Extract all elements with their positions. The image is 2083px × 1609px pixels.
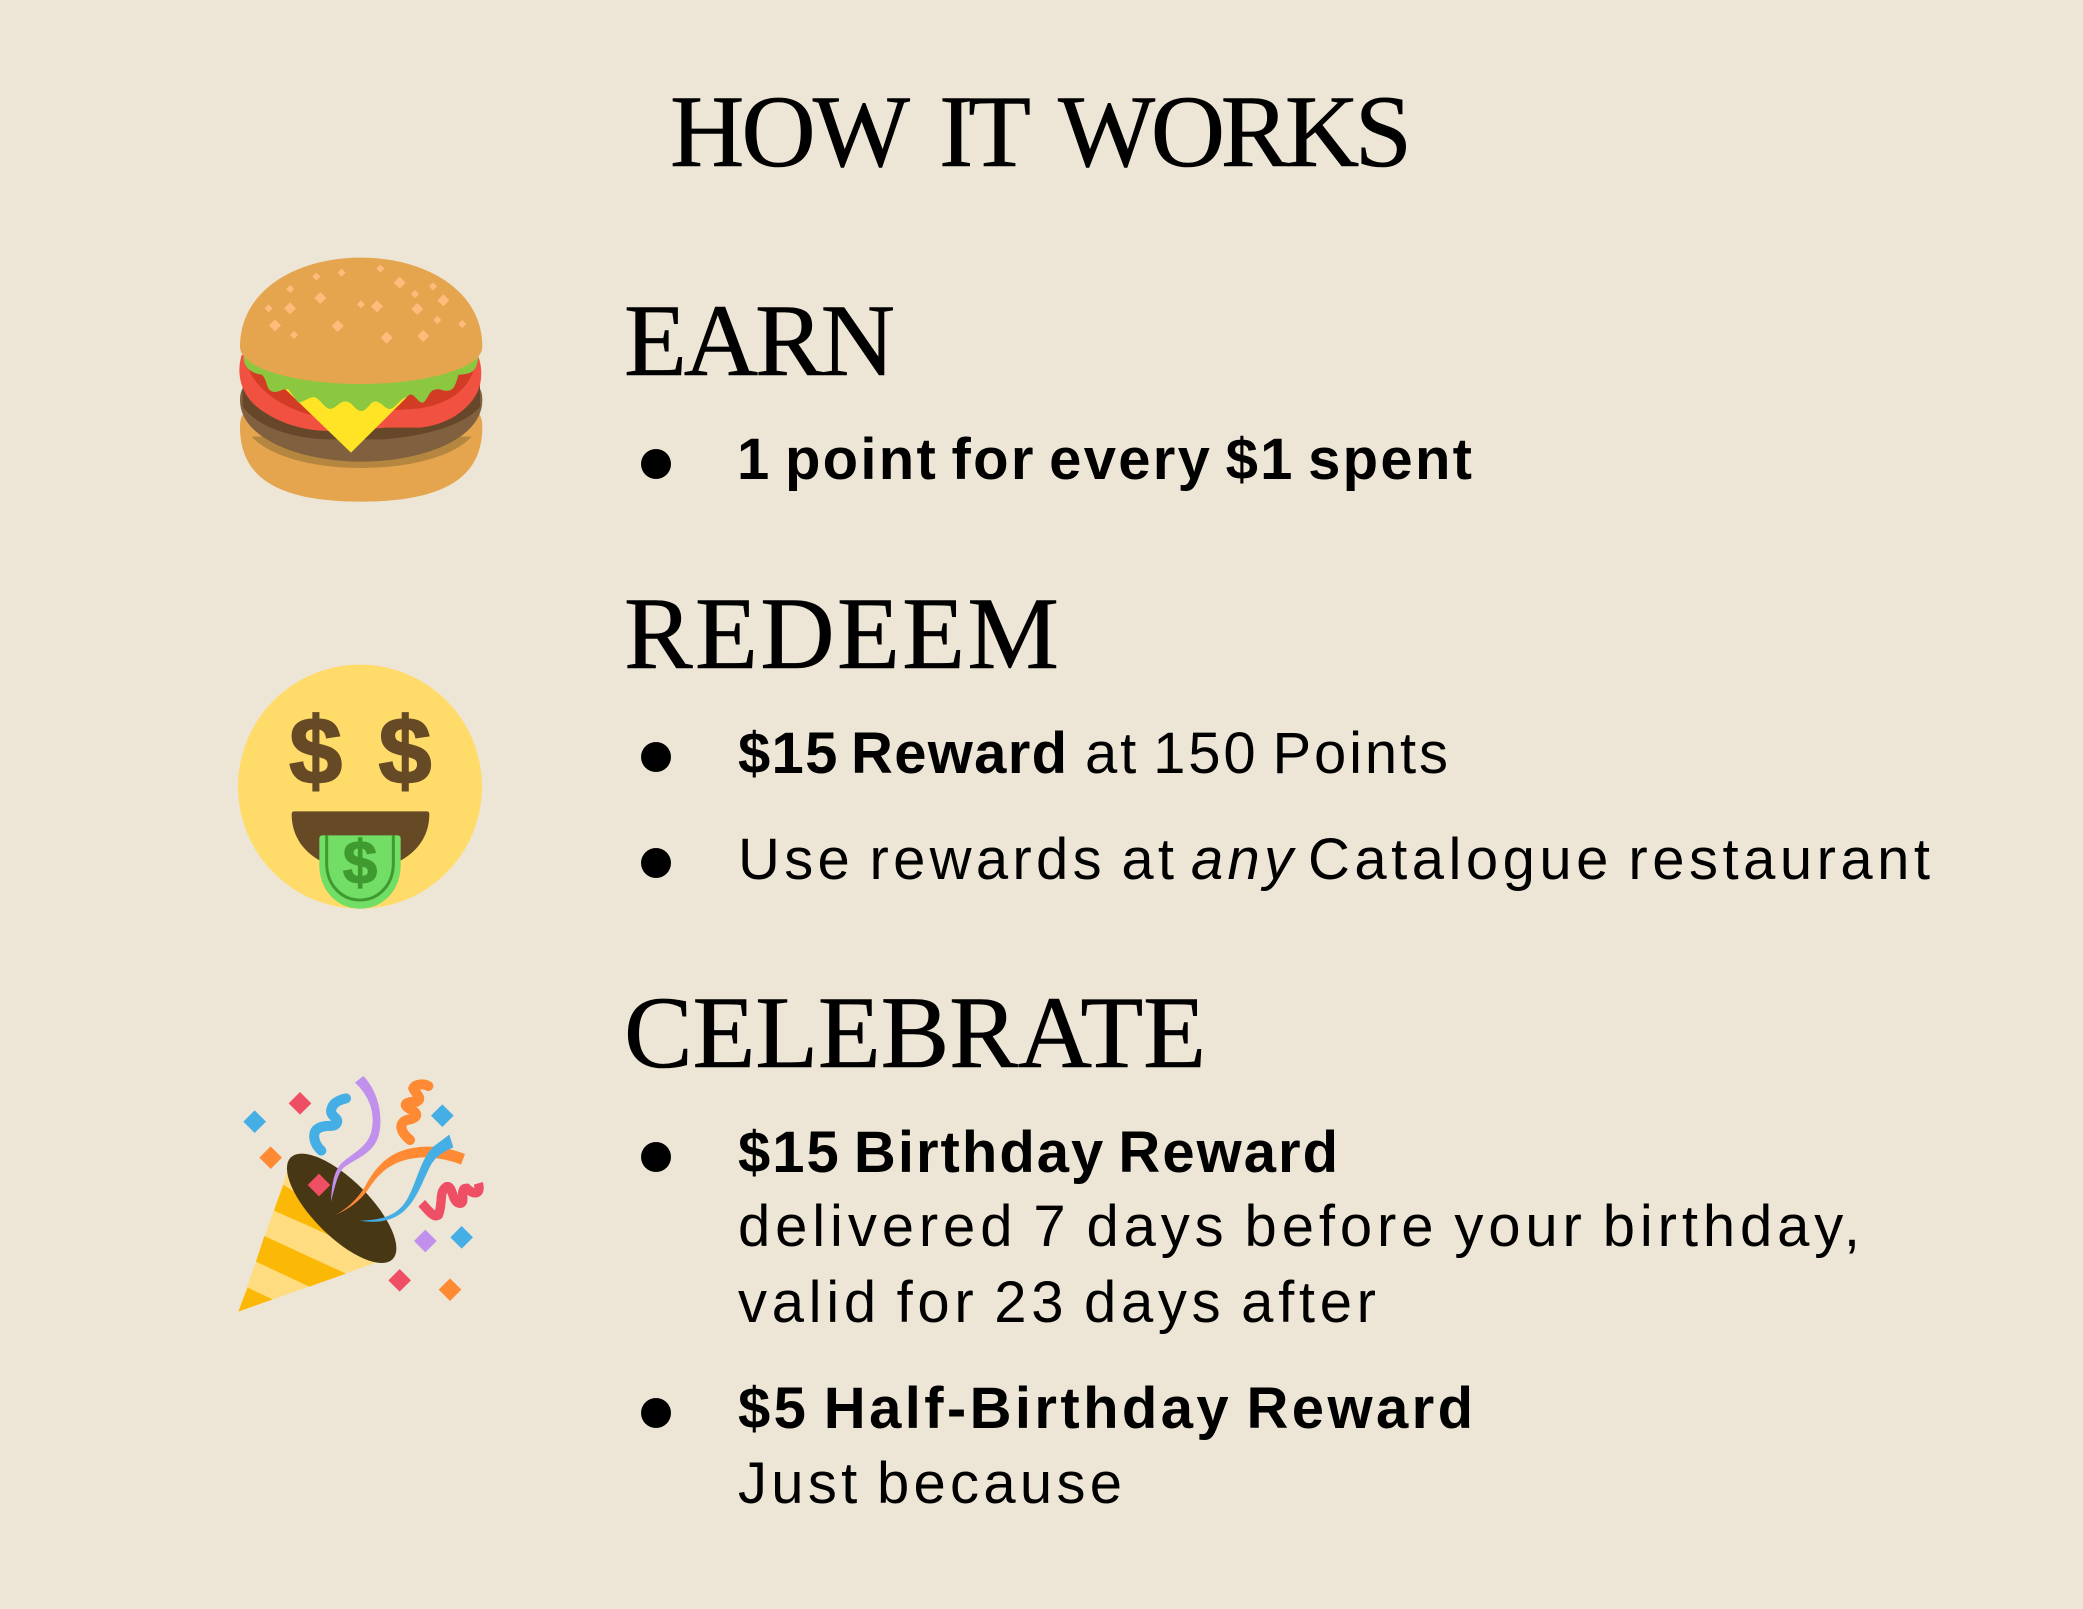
icon: party popper	[238, 1076, 479, 1312]
text: use rewards	[738, 827, 1930, 892]
text: birthday reward: $15 Birthday Reward	[738, 1120, 1338, 1185]
text: birthday reward: delivered 7 days before your birthday,	[738, 1194, 1860, 1259]
icon: money-mouth face: $	[379, 698, 431, 804]
title: WORKS	[1058, 75, 1412, 189]
heading: redeem: REDEEM	[624, 577, 1059, 691]
text: reward threshold: $15 Reward	[738, 721, 1067, 786]
icon: money-mouth face: $	[343, 828, 377, 897]
bullet: earn	[641, 449, 671, 479]
text: half-birthday reward: $5 Half-Birthday Reward	[738, 1376, 1473, 1441]
text: birthday reward: valid for 23 days after	[738, 1270, 1376, 1335]
title: IT	[939, 75, 1031, 189]
title	[670, 75, 1412, 189]
icon: money-mouth face: $	[289, 698, 342, 804]
bullet: birthday reward	[641, 1142, 671, 1172]
text: use rewards: Catalogue restaurant	[1308, 827, 1930, 892]
icon: money-mouth face	[238, 665, 482, 909]
text: half-birthday reward: Just because	[738, 1451, 1122, 1516]
bullet: reward threshold	[641, 742, 671, 772]
title: HOW	[670, 75, 911, 189]
icon: hamburger	[239, 258, 482, 502]
text: reward threshold: at 150 Points	[1085, 721, 1448, 786]
heading: celebrate: CELEBRATE	[624, 976, 1206, 1090]
bullet: half-birthday reward	[641, 1398, 671, 1428]
text: birthday reward	[738, 1120, 1860, 1335]
text: use rewards: any	[1191, 827, 1296, 892]
text: half-birthday reward	[738, 1376, 1473, 1516]
text: earn point rule: 1 point for every $1 spent	[737, 427, 1472, 492]
text: use rewards: Use rewards at	[738, 827, 1174, 892]
bullet: use rewards	[641, 848, 671, 878]
text: reward threshold	[738, 721, 1448, 786]
heading: earn: EARN	[624, 284, 895, 398]
